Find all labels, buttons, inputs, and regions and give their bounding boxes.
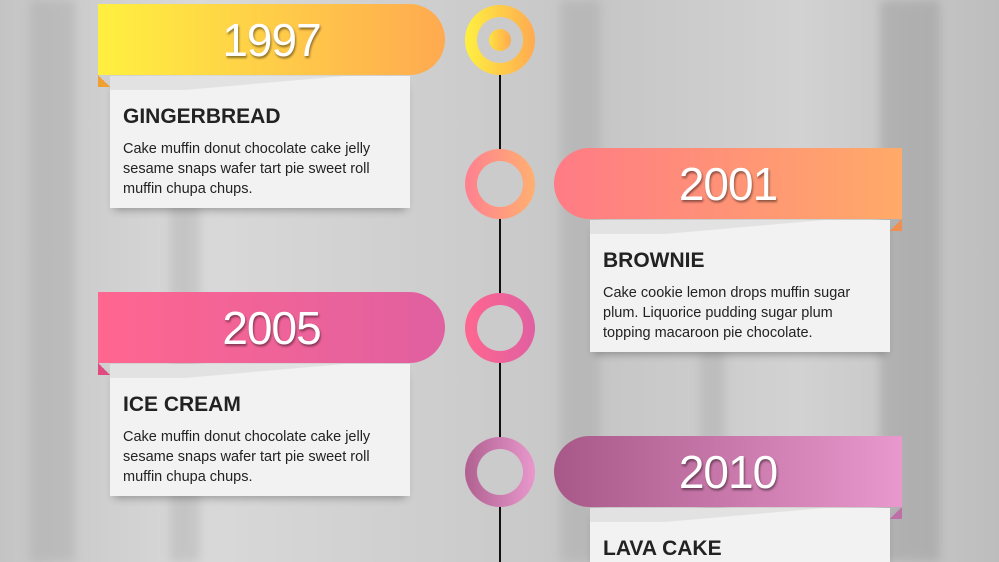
- icon: timeline node 2001: [465, 149, 535, 219]
- card: brownie: BROWNIE: [603, 249, 704, 272]
- card: lava cake: LAVA CAKE: [603, 537, 722, 560]
- panel: 1997: [98, 4, 535, 214]
- card: gingerbread: Cake muffin donut chocolate cake jelly sesame snaps wafer tart pie sweet roll muffin chupa chups.: [123, 141, 370, 197]
- banner: 1997: [98, 4, 445, 75]
- fold: [890, 219, 902, 231]
- panel: 2005: [98, 292, 535, 502]
- banner: 1997: 1997: [222, 14, 321, 66]
- card: ice cream: [110, 364, 410, 496]
- banner: 2010: 2010: [679, 446, 777, 498]
- banner: 2010: [554, 436, 902, 507]
- card: lava cake: [590, 508, 890, 562]
- panel: 2010: [465, 436, 902, 562]
- card: ice cream: ICE CREAM: [123, 393, 241, 416]
- banner: 2005: 2005: [222, 302, 321, 354]
- fold: [98, 363, 110, 375]
- banner: 2001: 2001: [679, 158, 777, 210]
- icon: timeline node 1997: [465, 5, 535, 75]
- card: brownie: [590, 220, 890, 352]
- fold: [890, 507, 902, 519]
- panel: 2001: [465, 148, 902, 358]
- banner: 2005: [98, 292, 445, 363]
- fold: [98, 75, 110, 87]
- icon: timeline node 2005: [465, 293, 535, 363]
- card: gingerbread: [110, 76, 410, 208]
- card: ice cream: Cake muffin donut chocolate cake jelly sesame snaps wafer tart pie sweet roll muffin chupa chups.: [123, 429, 370, 485]
- card: brownie: Cake cookie lemon drops muffin sugar plum. Liquorice pudding sugar plum topping macaroon pie chocolate.: [603, 285, 850, 341]
- card: gingerbread: GINGERBREAD: [123, 105, 281, 128]
- banner: 2001: [554, 148, 902, 219]
- icon: timeline node 2010: [465, 437, 535, 507]
